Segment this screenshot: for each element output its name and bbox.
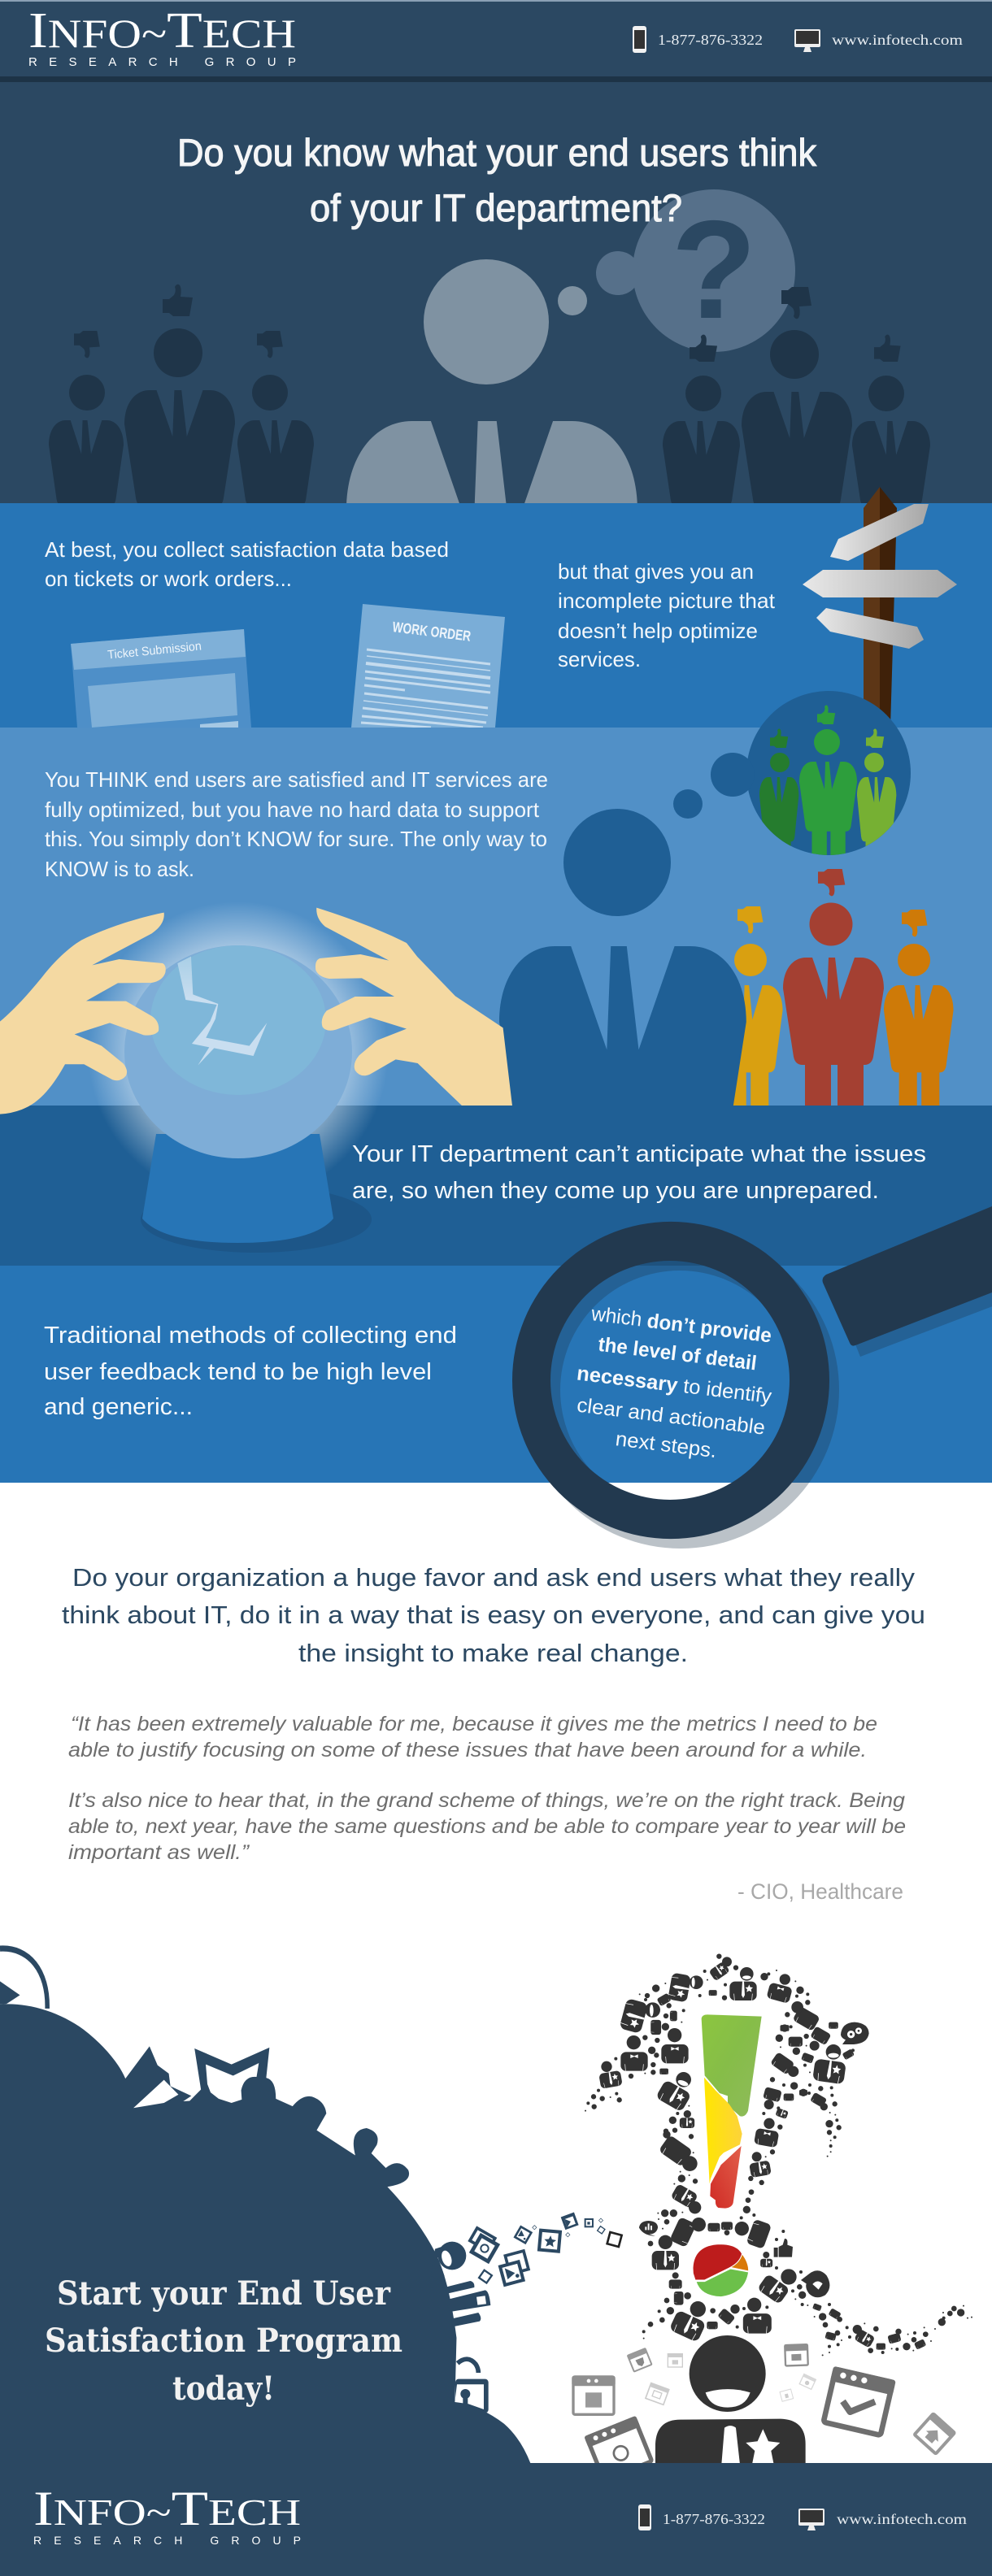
text: attribution: - CIO, Healthcare [737, 1879, 903, 1904]
text: incomplete picture: incomplete picture that [558, 589, 776, 613]
text: testimonial quote: It’s also nice to hear that, in the grand scheme of things, we’re on the right track. Being [68, 1789, 905, 1812]
icon: thumbs up [774, 2239, 793, 2257]
icon: monitor, footer [798, 2509, 824, 2530]
logo: Info-Tech: INFO ~TECH [28, 3, 296, 59]
mouths [650, 1975, 839, 2087]
exclamation mark [702, 2014, 762, 2209]
text: call to action statement: Do your organization a huge favor and ask end users what they really [72, 1563, 916, 1592]
phone number: 1-877-876-3322 [658, 32, 763, 48]
icon: work order sheet: WORK ORDER [392, 619, 472, 645]
IT manager figure, blue [499, 809, 746, 1309]
text: you think: You THINK end users are satisfied and IT services are [45, 767, 548, 792]
icon: magnifying glass [512, 1206, 992, 1549]
text: call to action statement: think about IT, do it in a way that is easy on everyone, and can give you [62, 1601, 925, 1629]
text: tickets: At best, you collect satisfaction data based [45, 537, 449, 562]
text: inside lens: next steps. [614, 1427, 718, 1462]
icon: signpost [803, 487, 957, 728]
icon: unhappy users [713, 869, 954, 1106]
user icons, ring [652, 2183, 926, 2350]
phone number, footer: 1-877-876-3322 [663, 2511, 765, 2527]
user heads [601, 1957, 841, 2171]
panel: hero background [0, 0, 992, 503]
white background for lower half [0, 1483, 992, 2463]
text: testimonial quote: “It has been extremely valuable for me, because it gives me the metrics I need to be [71, 1713, 877, 1735]
text: traditional methods: and generic... [44, 1394, 193, 1420]
logo: footer: RESEARCH GROUP [33, 2534, 301, 2547]
panel: THINK vs KNOW [0, 691, 992, 1309]
logo: Info-Tech: RESEARCH GROUP [28, 55, 296, 69]
head [431, 2242, 466, 2282]
title: Do you know what your end users think [177, 131, 816, 174]
illustration: exclamation mark made of user icons [585, 1957, 869, 2209]
text: call to action statement: the insight to make real change. [298, 1639, 688, 1667]
text: start your program: Satisfaction Program [45, 2322, 402, 2360]
text: you think [45, 767, 548, 881]
icon: crystal ball [88, 901, 389, 1253]
text: start your program: Start your End User [57, 2274, 391, 2313]
logo: footer: INFO ~TECH [33, 2482, 301, 2535]
panel: can't anticipate [0, 1106, 992, 1266]
scattered dots [644, 2213, 972, 2355]
text: you think: fully optimized, but you have no hard data to support [45, 797, 540, 822]
text: testimonial quote: important as well.” [68, 1841, 250, 1864]
title: of your IT department? [310, 186, 682, 229]
text: incomplete picture: but that gives you an [558, 559, 754, 584]
text: traditional methods: Traditional methods of collecting end [44, 1323, 457, 1349]
panel: traditional methods [0, 1266, 992, 1483]
pie chart [693, 2244, 749, 2297]
text: inside lens: necessary to identify [576, 1362, 773, 1408]
chat bubbles [639, 2221, 829, 2297]
icon: question thought bubble: ? [671, 192, 757, 348]
icon: left hand [0, 913, 166, 1114]
text: start your program: today! [172, 2370, 275, 2408]
text: testimonial quote [68, 1713, 906, 1864]
IT manager figure [346, 259, 637, 848]
lock [455, 2359, 489, 2413]
browser windows, grey [572, 2344, 955, 2481]
user icons, upper arms [598, 1961, 869, 2178]
crack [177, 957, 267, 1066]
text: you think: KNOW is to ask. [45, 857, 194, 881]
main head and suit [655, 2335, 806, 2465]
text: unprepared: Your IT department can’t anticipate what the issues [352, 1141, 926, 1167]
icon: phone, footer [638, 2504, 651, 2530]
scattered dots [585, 1970, 835, 2184]
icon: work order sheet [351, 604, 505, 728]
heads [659, 2201, 902, 2335]
icon: question thought bubble [558, 189, 795, 352]
text: incomplete picture: services. [558, 647, 641, 671]
title [177, 131, 816, 229]
header bar [0, 0, 992, 82]
panel: dark blob call to action [0, 1948, 530, 2472]
text: testimonial quote: able to justify focusing on some of these issues that have been around for a while. [68, 1739, 867, 1761]
text: inside lens: the level of detail [597, 1333, 758, 1375]
icon: phone [633, 26, 646, 53]
text: traditional methods: user feedback tend to be high level [44, 1359, 432, 1385]
text: traditional methods [44, 1323, 457, 1420]
text: unprepared [352, 1141, 926, 1204]
icon: monitor [794, 29, 820, 52]
text: tickets [45, 537, 449, 591]
text: incomplete picture: doesn’t help optimize [558, 619, 758, 643]
illustration: user with pie chart and windows [572, 2183, 972, 2481]
text: call to action statement [62, 1563, 925, 1667]
icon: ticket submission form: Ticket Submission [107, 639, 202, 662]
website: www.infotech.com [832, 32, 963, 48]
crowd: left group [49, 285, 314, 553]
text: you think: this. You simply don’t KNOW for sure. The only way to [45, 827, 547, 851]
text: tickets: on tickets or work orders... [45, 567, 292, 591]
crowd: right group [663, 287, 930, 554]
icon: flying document icons, blue [431, 2213, 622, 2413]
panel: tickets and work orders [0, 487, 992, 728]
icon: ticket submission form [71, 629, 251, 728]
bars [445, 2281, 490, 2326]
text: inside lens [576, 1302, 773, 1462]
text: inside lens: clear and actionable [576, 1394, 767, 1440]
text: unprepared: are, so when they come up you are unprepared. [352, 1178, 879, 1204]
icon: right hand [315, 908, 512, 1106]
website, footer: www.infotech.com [837, 2511, 967, 2527]
icon: happy users thought bubble [673, 691, 911, 866]
text: start your program [45, 2274, 402, 2408]
text: testimonial quote: able to, next year, have the same questions and be able to compare year to year will be [68, 1815, 906, 1838]
text: incomplete picture [558, 559, 776, 671]
panel: footer [0, 2463, 992, 2576]
text: inside lens: which don’t provide [590, 1302, 773, 1347]
